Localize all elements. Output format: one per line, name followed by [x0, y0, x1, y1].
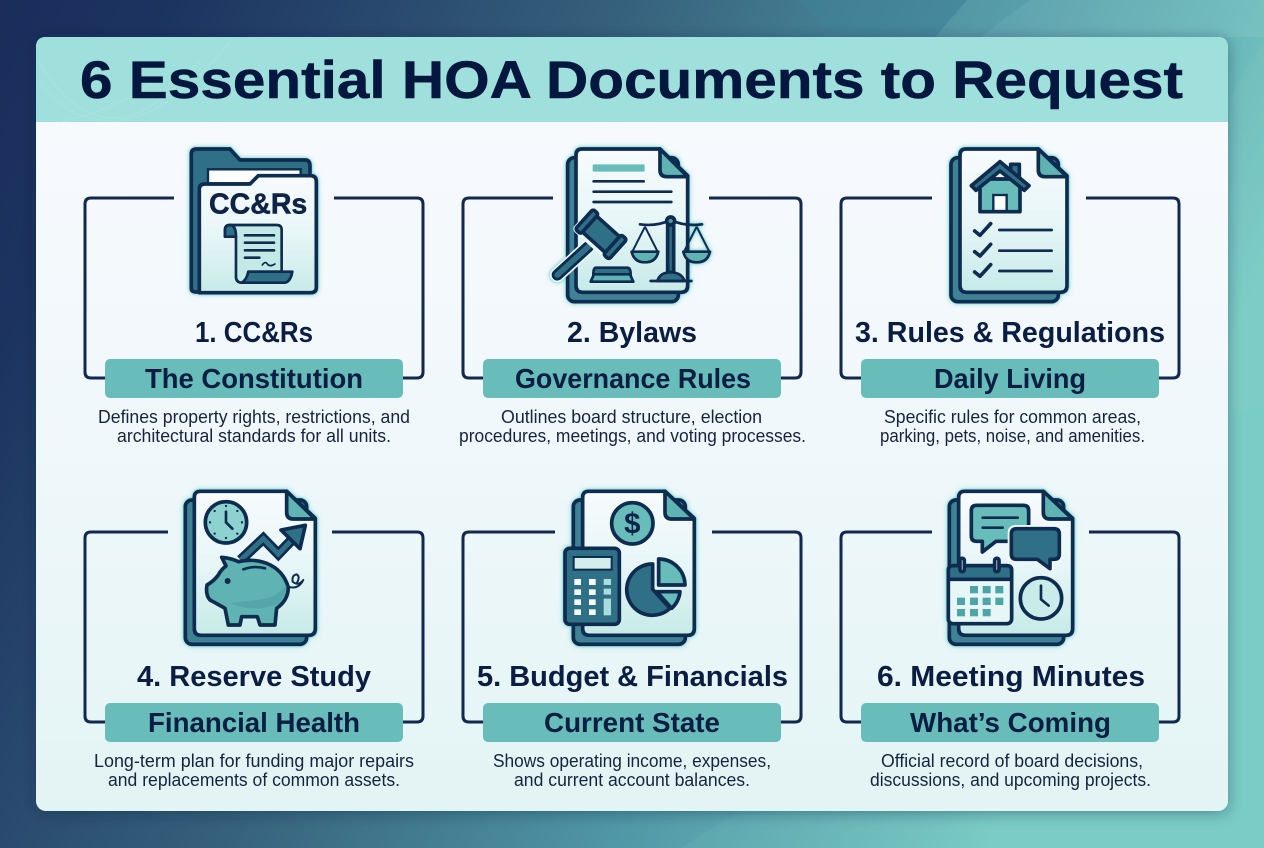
heading: 4. Reserve Study — [137, 661, 371, 693]
heading: 5. Budget & Financials — [477, 661, 788, 693]
frame — [85, 198, 423, 378]
label pill — [105, 703, 403, 742]
label pill — [861, 703, 1159, 742]
description: discussions, and upcoming projects. — [870, 770, 1151, 790]
description: and replacements of common assets. — [108, 770, 400, 790]
frame — [841, 532, 1179, 722]
heading: 1. CC&Rs — [195, 317, 313, 349]
frame — [463, 532, 801, 722]
icon: document with calculator and pie chart: $ — [624, 508, 640, 541]
description — [94, 751, 414, 790]
panel: Reserve Study — [85, 491, 423, 790]
label pill: What’s Coming — [910, 707, 1111, 738]
panel: Rules & Regulations — [841, 149, 1179, 446]
icon: document with gavel and scales — [557, 149, 710, 302]
title: 6 Essential HOA Documents to Request — [80, 51, 1183, 110]
description — [493, 751, 771, 790]
label pill: Daily Living — [934, 363, 1086, 394]
label pill — [483, 703, 781, 742]
panel: Budget & Financials — [463, 491, 801, 790]
description: Official record of board decisions, — [881, 751, 1143, 771]
label pill — [483, 359, 781, 398]
icon: document with clock, arrow and piggy bank — [185, 491, 315, 644]
description: architectural standards for all units. — [117, 426, 391, 446]
icon: folder with scroll: CC&Rs — [209, 188, 307, 220]
panel: CC&Rs — [85, 149, 423, 446]
heading: 3. Rules & Regulations — [855, 317, 1165, 349]
description: parking, pets, noise, and amenities. — [880, 426, 1145, 446]
description: Defines property rights, restrictions, and — [98, 407, 410, 427]
title banner — [36, 37, 1228, 122]
description: Shows operating income, expenses, — [493, 751, 771, 771]
description: and current account balances. — [514, 770, 750, 790]
description: Outlines board structure, election — [501, 407, 762, 427]
description — [459, 407, 806, 446]
description: procedures, meetings, and voting processes. — [459, 426, 806, 446]
heading: 2. Bylaws — [567, 317, 697, 349]
label pill: Financial Health — [148, 707, 360, 738]
icon: folder with scroll — [191, 149, 316, 293]
description — [98, 407, 410, 446]
frame — [463, 198, 801, 378]
icon: document with calculator and pie chart — [565, 491, 694, 644]
description: Specific rules for common areas, — [884, 407, 1141, 427]
frame — [85, 532, 423, 722]
heading: 6. Meeting Minutes — [877, 661, 1145, 693]
panel: Meeting Minutes — [841, 491, 1179, 790]
label pill: Governance Rules — [515, 363, 751, 394]
description — [880, 407, 1145, 446]
label pill: Current State — [544, 707, 720, 738]
label pill — [861, 359, 1159, 398]
icon: document with house and checklist — [951, 149, 1067, 302]
label pill: The Constitution — [145, 363, 363, 394]
label pill — [105, 359, 403, 398]
frame — [841, 198, 1179, 378]
icon: document with speech bubbles, calendar and clock — [948, 491, 1073, 644]
description: Long-term plan for funding major repairs — [94, 751, 414, 771]
panel: Bylaws — [459, 149, 806, 446]
description — [870, 751, 1151, 790]
